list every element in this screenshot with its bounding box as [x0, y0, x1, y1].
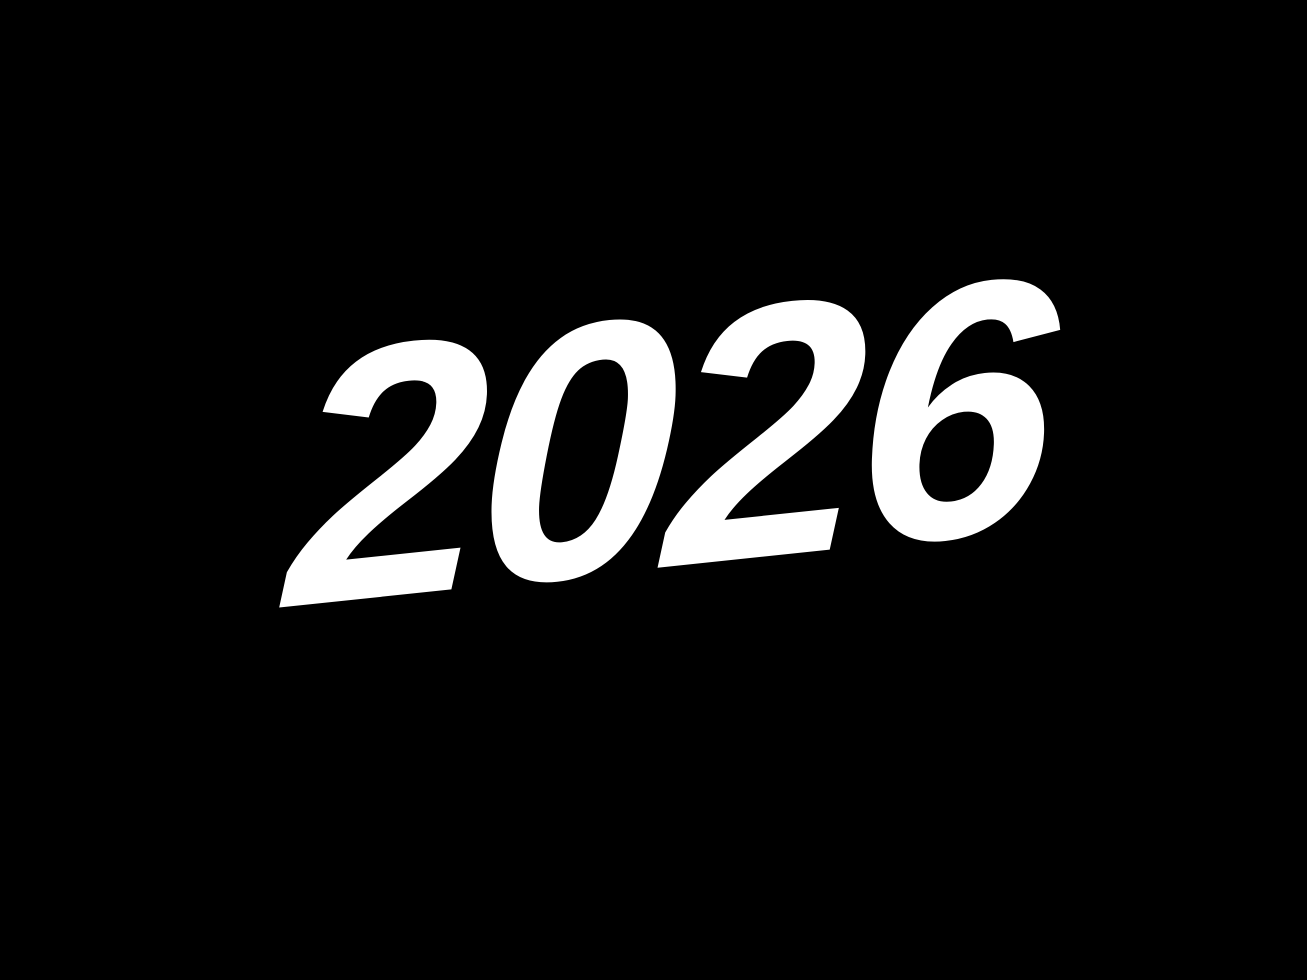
title: brush-style year 2026: 2026 — [282, 199, 1053, 685]
